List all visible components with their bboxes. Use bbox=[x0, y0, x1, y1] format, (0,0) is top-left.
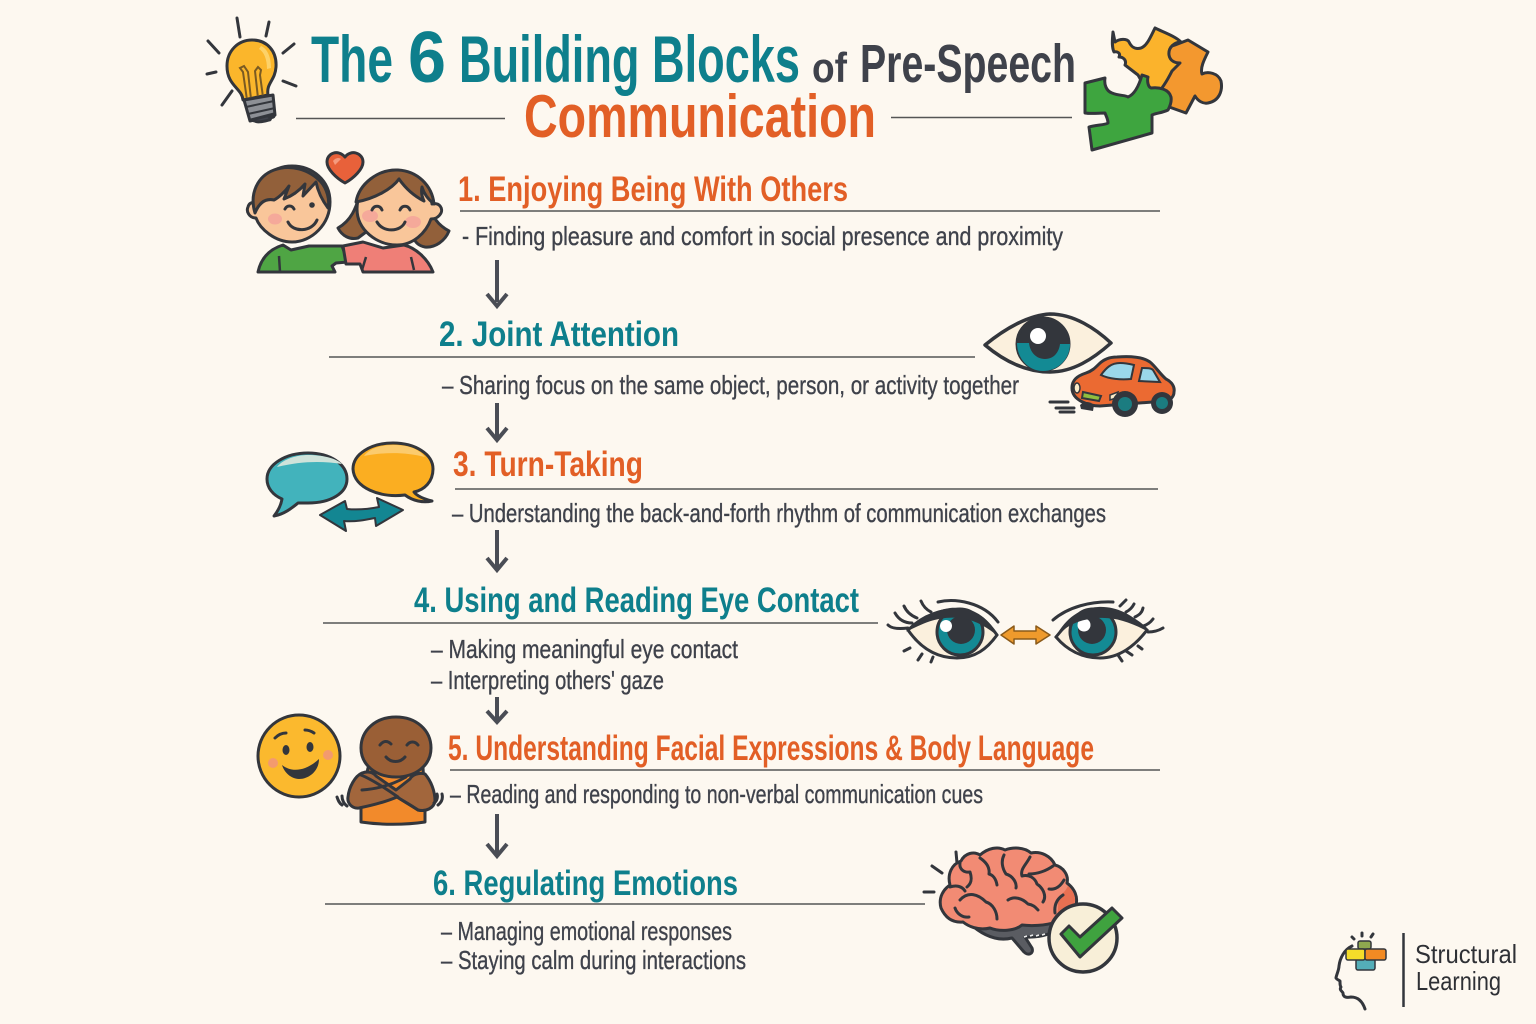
arrow: step 4 to 5 bbox=[487, 697, 507, 722]
title: Communication bbox=[524, 83, 876, 150]
icon: brain with check mark bbox=[924, 848, 1122, 972]
title: Pre-Speech bbox=[860, 34, 1076, 94]
icon: smiling face bbox=[258, 715, 340, 797]
arrow: step 2 to 3 bbox=[487, 403, 507, 440]
title bbox=[296, 18, 1076, 150]
text: step 2 description: – Sharing focus on the same object, person, or activity together bbox=[442, 370, 1019, 400]
title: Building Blocks bbox=[459, 22, 800, 96]
icon: light bulb bbox=[207, 18, 296, 122]
text: step 4 description: – Interpreting others' gaze bbox=[431, 665, 664, 695]
arrow: step 3 to 4 bbox=[487, 530, 507, 570]
panel: step 5 bbox=[448, 729, 1160, 809]
logo: Structural Learning bbox=[1336, 933, 1517, 1009]
text: step 5 description: – Reading and responding to non-verbal communication cues bbox=[450, 779, 983, 809]
text: step 4 description: – Making meaningful eye contact bbox=[431, 634, 739, 664]
text: step 6 description: – Staying calm during interactions bbox=[441, 945, 746, 975]
icon: orange car bbox=[1050, 357, 1174, 417]
panel: step 3 bbox=[452, 445, 1158, 528]
icon: puzzle pieces bbox=[1085, 28, 1221, 150]
logo wordmark: Learning bbox=[1416, 966, 1501, 996]
title: of bbox=[812, 44, 848, 91]
arrow: step 1 to 2 bbox=[487, 260, 507, 306]
panel: step 4 bbox=[323, 581, 878, 695]
icon: two children with heart bbox=[247, 153, 449, 272]
heading: step 2: 2. Joint Attention bbox=[439, 315, 679, 354]
icon: eye bbox=[985, 314, 1111, 372]
heading: step 4: 4. Using and Reading Eye Contact bbox=[414, 581, 859, 620]
heading: step 6: 6. Regulating Emotions bbox=[433, 864, 738, 903]
heading: step 3: 3. Turn-Taking bbox=[453, 445, 643, 484]
heading: step 1: 1. Enjoying Being With Others bbox=[458, 170, 848, 209]
icon: two eyes with arrow bbox=[888, 600, 1163, 662]
arrow: step 5 to 6 bbox=[487, 814, 507, 856]
text: step 3 description: – Understanding the back-and-forth rhythm of communication exchanges bbox=[452, 498, 1106, 528]
double arrow bbox=[1001, 626, 1050, 644]
logo wordmark: Structural bbox=[1415, 939, 1517, 969]
panel: step 6 bbox=[325, 864, 925, 975]
text: step 6 description: – Managing emotional responses bbox=[441, 916, 732, 946]
heading: step 5: 5. Understanding Facial Expressions & Body Language bbox=[448, 729, 1094, 768]
title: The bbox=[311, 22, 393, 96]
panel: step 2 bbox=[329, 315, 1019, 400]
icon: person with crossed arms bbox=[337, 717, 442, 824]
icon: head with blocks bbox=[1336, 933, 1386, 1009]
title: 6 bbox=[408, 18, 446, 98]
right eye bbox=[1053, 600, 1163, 661]
left eye bbox=[888, 601, 998, 662]
text: step 1 description: - Finding pleasure and comfort in social presence and proximity bbox=[462, 221, 1063, 251]
icon: speech bubbles with exchange arrow bbox=[267, 443, 433, 531]
panel: step 1 bbox=[458, 170, 1160, 251]
